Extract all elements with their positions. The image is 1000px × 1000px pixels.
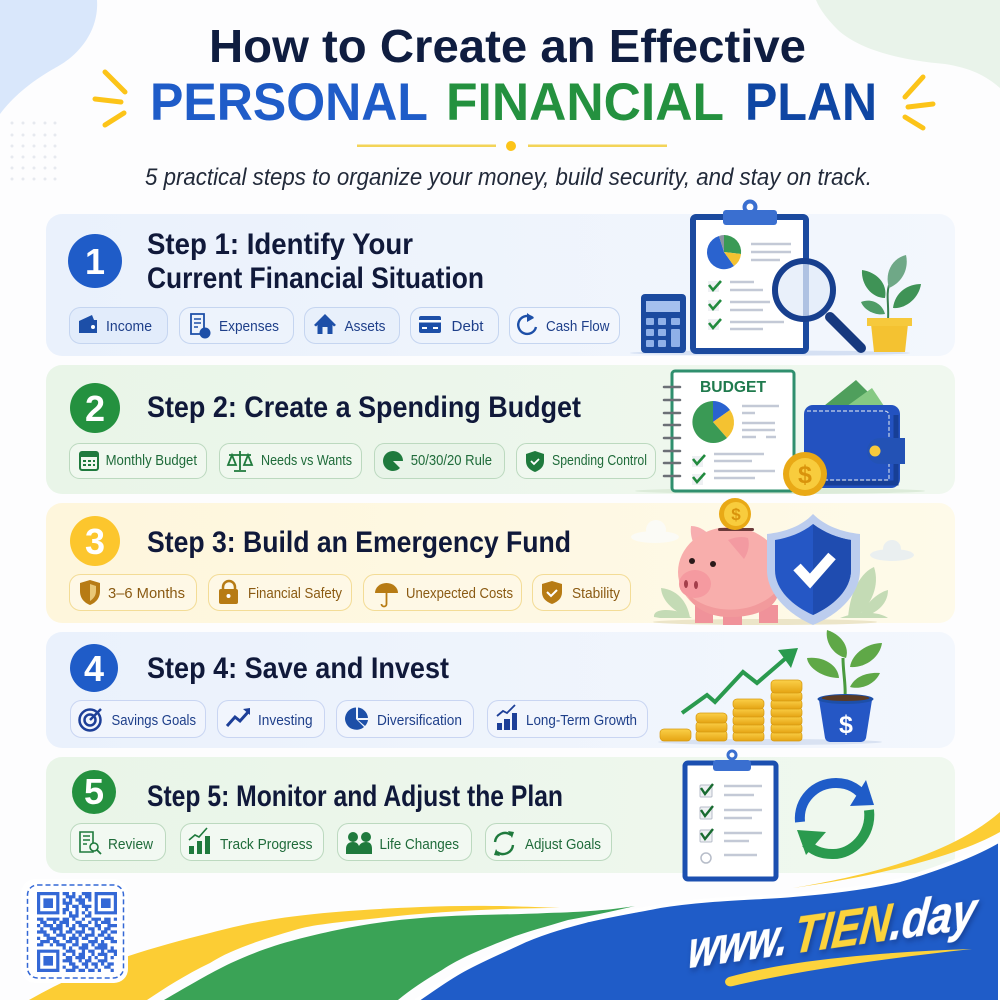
chip: savings goals bbox=[70, 700, 206, 738]
chip: spending control: Spending Control bbox=[552, 452, 647, 469]
chip: 50/30/20 rule bbox=[374, 444, 504, 478]
subtitle: 5 practical steps to organize your money, build security, and stay on track. bbox=[145, 164, 872, 191]
chip: financial safety bbox=[208, 574, 352, 610]
chip: assets bbox=[304, 308, 400, 344]
icon: coin in slot: $ bbox=[731, 505, 741, 524]
QR code bbox=[21, 879, 128, 983]
panel: step 5 bbox=[46, 751, 955, 879]
chip: long-term growth: Long-Term Growth bbox=[526, 712, 637, 729]
chip: needs vs wants: Needs vs Wants bbox=[261, 452, 352, 469]
chip: expenses: Expenses bbox=[219, 318, 279, 335]
chip: stability bbox=[532, 574, 630, 610]
chip: 3-6 months bbox=[70, 574, 196, 610]
website brand bbox=[686, 880, 981, 986]
icon: coin: $ bbox=[798, 461, 812, 489]
background blob: top left bbox=[0, 0, 97, 114]
icon: shield with check bbox=[767, 514, 860, 625]
chip: savings goals: Savings Goals bbox=[112, 712, 196, 729]
panel: step 1 bbox=[46, 202, 955, 356]
icon: clipboard bbox=[693, 202, 806, 351]
illustration: growth and coins bbox=[658, 630, 882, 745]
panel: step 4 bbox=[46, 630, 955, 748]
footer swoosh: blue bbox=[417, 840, 1000, 1000]
website text: .day bbox=[888, 880, 981, 951]
footer swoosh: yellow left bbox=[29, 906, 560, 1000]
number badge 4: 4 bbox=[84, 648, 104, 689]
chip: cash flow: Cash Flow bbox=[546, 318, 610, 335]
illustration: clipboard analysis bbox=[630, 202, 921, 356]
footer swoosh: green bbox=[164, 906, 635, 1000]
chip: life changes: Life Changes bbox=[380, 836, 459, 853]
chip: debt bbox=[410, 308, 498, 344]
icon: checklist clipboard bbox=[685, 751, 776, 879]
number badge 1 bbox=[68, 234, 122, 288]
number badge 3 bbox=[70, 516, 120, 566]
number badge 3: 3 bbox=[85, 521, 105, 562]
icon: cycle arrows bbox=[797, 780, 874, 855]
chip: long-term growth bbox=[488, 700, 648, 738]
number badge 2: 2 bbox=[85, 388, 105, 429]
chip: adjust goals bbox=[486, 824, 612, 860]
chip: life changes bbox=[338, 824, 472, 860]
panel: step 2 bbox=[46, 365, 955, 496]
heading: step 2: Step 2: Create a Spending Budget bbox=[147, 391, 581, 424]
icon: magnifier bbox=[775, 261, 861, 348]
heading: step 1: Step 1: Identify Your bbox=[147, 228, 413, 261]
panel: step 3 bbox=[46, 498, 955, 625]
icon: left burst bbox=[95, 72, 125, 125]
number badge 1: 1 bbox=[85, 241, 105, 282]
title: line 2 bbox=[150, 73, 877, 132]
budget label: BUDGET bbox=[700, 379, 766, 396]
website text: TIEN bbox=[792, 892, 895, 964]
chip: review: Review bbox=[108, 836, 153, 853]
chip: income bbox=[70, 308, 168, 344]
heading: step 1 bbox=[147, 228, 484, 295]
number badge 4 bbox=[70, 644, 118, 692]
number badge 5: 5 bbox=[84, 771, 104, 812]
chip: diversification bbox=[336, 700, 474, 738]
background blob: top right bbox=[816, 0, 1000, 88]
chip: monthly budget: Monthly Budget bbox=[106, 452, 198, 469]
icon: right burst bbox=[905, 77, 933, 128]
checkmarks bbox=[692, 455, 705, 485]
chip: 3-6 months: 3–6 Months bbox=[108, 585, 185, 602]
title divider bbox=[357, 141, 667, 151]
chip: needs vs wants bbox=[220, 444, 362, 478]
heading: step 3: Step 3: Build an Emergency Fund bbox=[147, 526, 571, 559]
chip: debt: Debt bbox=[452, 318, 484, 335]
heading: step 1: Current Financial Situation bbox=[147, 262, 484, 295]
website underline bbox=[725, 949, 972, 986]
icon: growth arrow bbox=[682, 648, 798, 713]
pie chart bbox=[692, 401, 734, 443]
dot pattern bbox=[10, 122, 56, 180]
icon: coin stacks bbox=[660, 680, 802, 741]
chip: expenses bbox=[180, 308, 294, 344]
website text: www. bbox=[686, 907, 791, 979]
title: line 1: How to Create an Effective bbox=[209, 20, 806, 72]
icon: piggy bank bbox=[678, 526, 782, 625]
number badge 5 bbox=[72, 770, 116, 814]
chip: assets: Assets bbox=[344, 318, 386, 335]
icon: notebook bbox=[664, 371, 794, 491]
chip: investing: Investing bbox=[258, 712, 313, 729]
chip: investing bbox=[218, 700, 324, 738]
icon: calculator bbox=[641, 294, 686, 353]
chip: track progress bbox=[180, 824, 324, 860]
illustration: budget notebook and wallet bbox=[635, 371, 925, 496]
icon: coin bbox=[783, 452, 827, 496]
icon: plant in dollar pot: $ bbox=[839, 711, 853, 739]
chip: review bbox=[70, 824, 166, 860]
heading: step 5: Step 5: Monitor and Adjust the Plan bbox=[147, 780, 563, 813]
chip: track progress: Track Progress bbox=[220, 836, 312, 853]
chip: monthly budget bbox=[70, 444, 206, 478]
illustration: checklist and cycle bbox=[685, 751, 874, 879]
footer swoosh: yellow right bbox=[793, 812, 1000, 888]
leaves bbox=[654, 567, 888, 618]
icon: plant in dollar pot bbox=[807, 630, 882, 742]
chip: adjust goals: Adjust Goals bbox=[525, 836, 601, 853]
number badge 2 bbox=[70, 383, 120, 433]
title word: financial: FINANCIAL bbox=[446, 73, 724, 132]
title word: plan: PLAN bbox=[745, 73, 877, 132]
website text bbox=[686, 880, 981, 979]
icon: coin in slot bbox=[719, 498, 751, 530]
icon: wallet bbox=[804, 380, 905, 488]
chip: 50/30/20 rule: 50/30/20 Rule bbox=[411, 452, 492, 469]
icon: potted plant bbox=[861, 255, 921, 352]
chip: financial safety: Financial Safety bbox=[248, 585, 342, 602]
clouds bbox=[631, 520, 914, 561]
illustration: piggy bank and shield bbox=[631, 498, 914, 625]
chip: unexpected costs: Unexpected Costs bbox=[406, 585, 513, 602]
chip: stability: Stability bbox=[572, 585, 620, 602]
pie chart bbox=[707, 235, 741, 269]
chip: income: Income bbox=[106, 318, 152, 335]
chip: spending control bbox=[516, 444, 656, 478]
heading: step 4: Step 4: Save and Invest bbox=[147, 652, 449, 685]
chip: cash flow bbox=[510, 308, 620, 344]
chip: unexpected costs bbox=[364, 574, 522, 610]
title word: personal: PERSONAL bbox=[150, 73, 428, 132]
chip: diversification: Diversification bbox=[377, 712, 462, 729]
checkmarks bbox=[708, 281, 721, 330]
checkmarks bbox=[700, 784, 713, 863]
